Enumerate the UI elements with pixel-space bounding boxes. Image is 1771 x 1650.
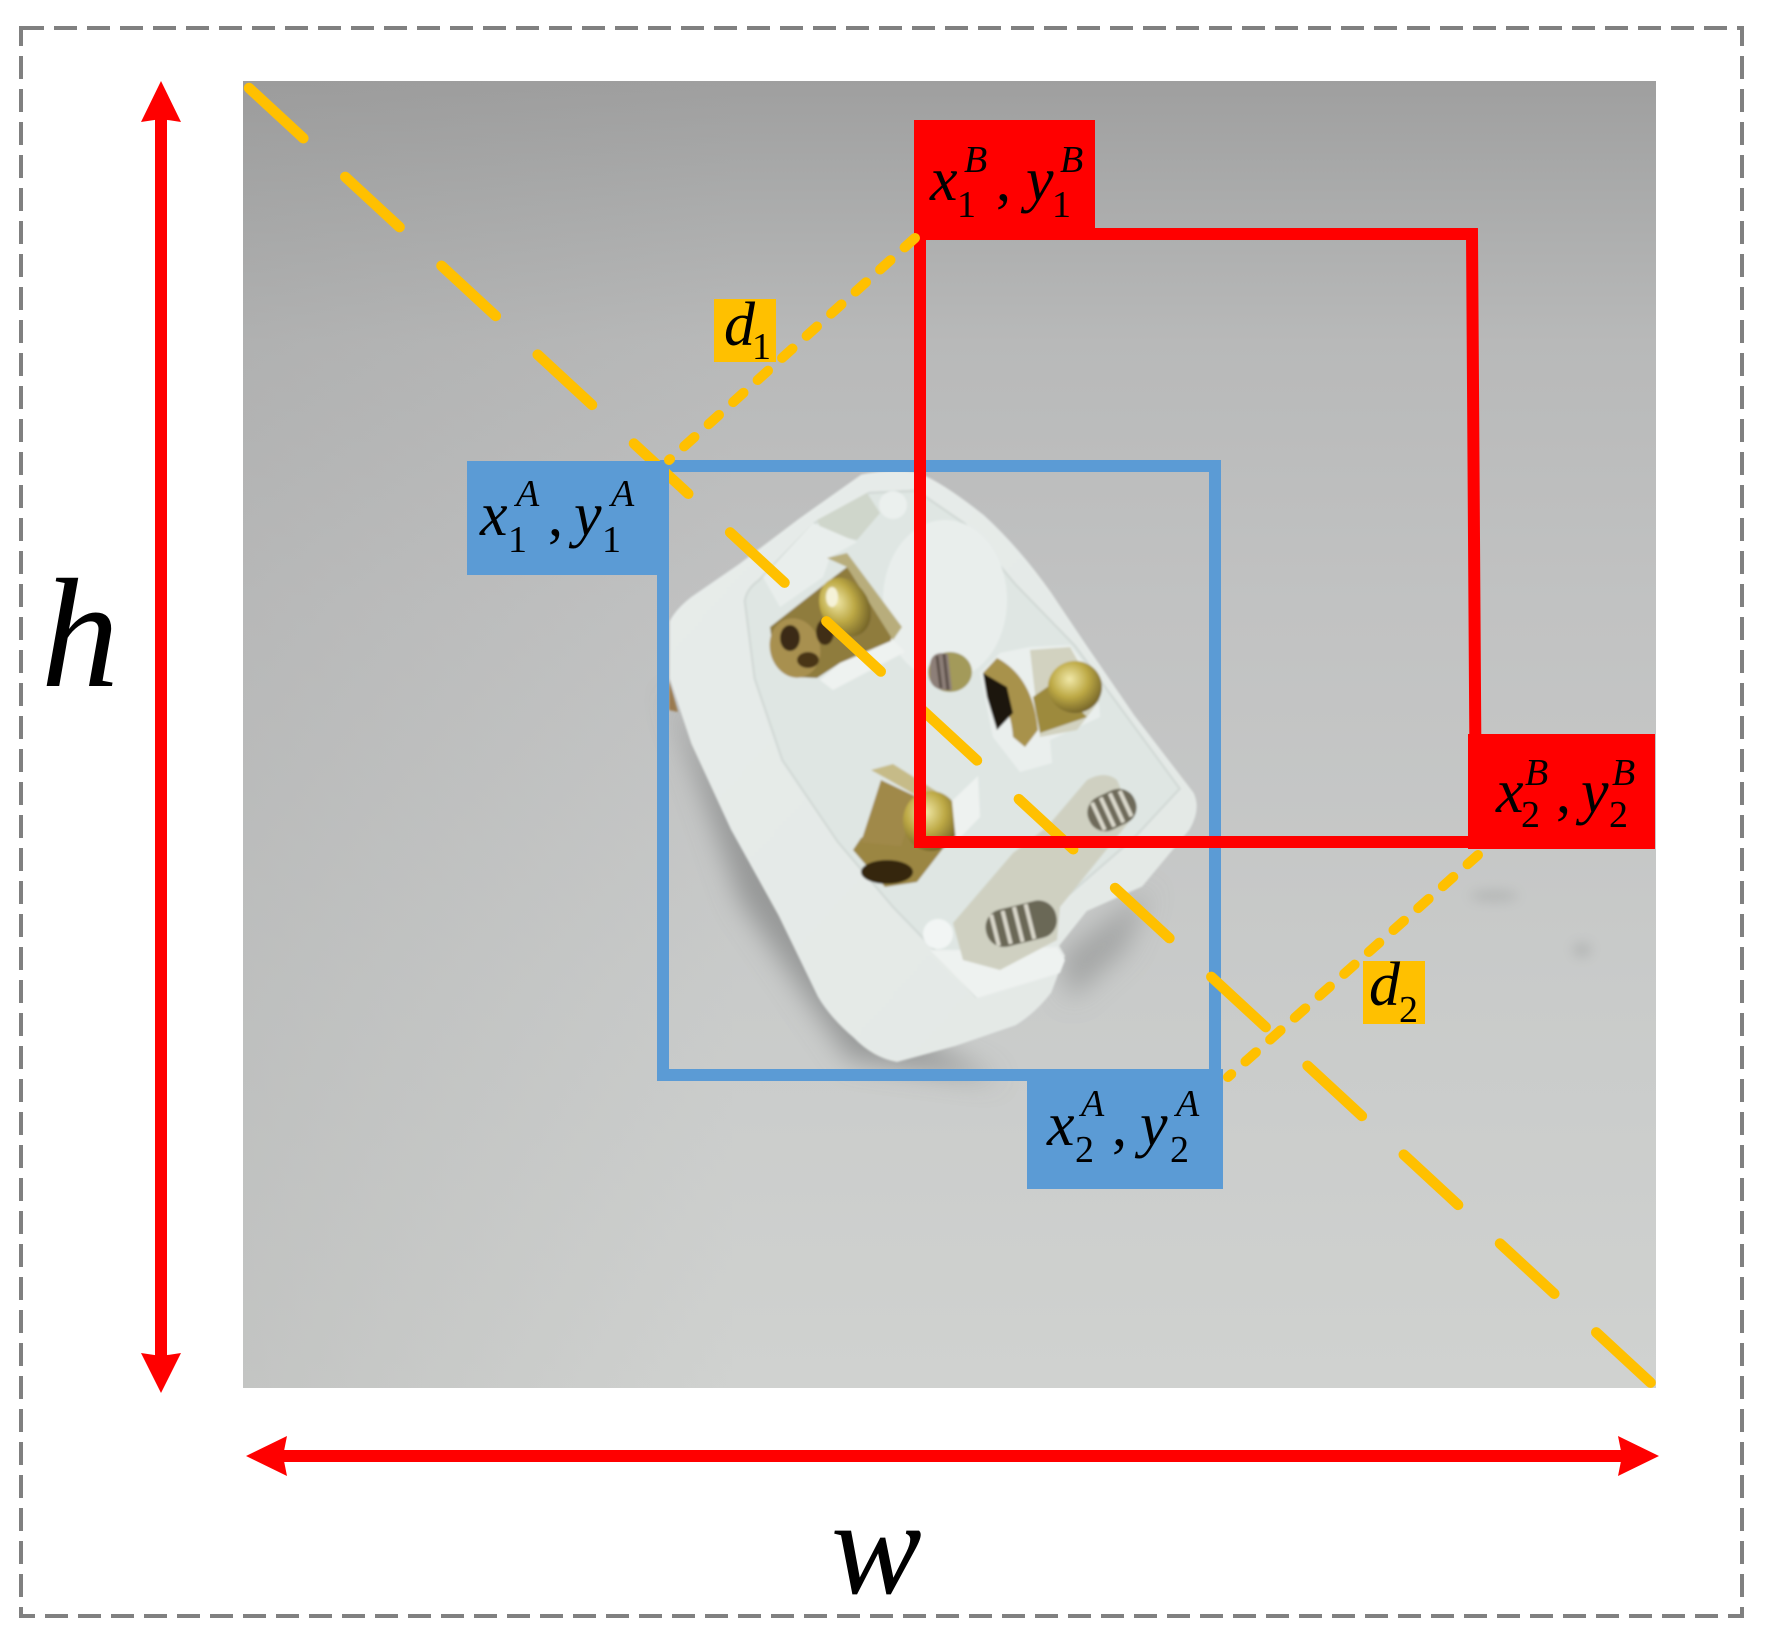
- label: box B top-left: B: [964, 139, 987, 181]
- small grey screw: [928, 652, 972, 692]
- plate retainer: [930, 947, 1065, 998]
- terminal two: [983, 658, 1102, 747]
- speck marks on surface: [1470, 891, 1591, 957]
- label: box A top-left: x: [479, 481, 508, 549]
- label: box A top-left: ,: [548, 482, 563, 548]
- terminal one clip: [763, 523, 857, 607]
- terminal one lower clip: [820, 640, 905, 690]
- plug cavity: [745, 491, 1180, 997]
- terminal two clip: [980, 645, 1100, 772]
- label: box B top-left: 1: [957, 184, 976, 226]
- label: box A top-left: [467, 461, 669, 575]
- plate screw upper: [1082, 783, 1142, 837]
- box A outline: [663, 466, 1215, 1075]
- knob top: [879, 491, 907, 519]
- distance d2 dotted line: [1228, 855, 1478, 1077]
- width label: w: [831, 1473, 922, 1623]
- label: box B bottom-right: x: [1495, 758, 1524, 826]
- plug shadows: [668, 690, 1150, 1080]
- label: box B bottom-right: 2: [1521, 794, 1540, 836]
- distance d1 dotted line: [669, 238, 915, 460]
- label: box B bottom-right: B: [1525, 752, 1548, 794]
- beige plate: [953, 775, 1133, 970]
- label: box B bottom-right: y: [1575, 758, 1609, 826]
- label: box A bottom-right: x: [1046, 1091, 1075, 1159]
- label: box A top-left: y: [568, 481, 602, 549]
- diagonal dashed line: [249, 88, 1651, 1383]
- label: box A bottom-right: 2: [1170, 1129, 1189, 1171]
- label: box A bottom-right: ,: [1112, 1092, 1127, 1158]
- lighter central recess: [883, 520, 1007, 680]
- plastic knob: [923, 919, 953, 949]
- label: box B top-left: ,: [996, 147, 1011, 213]
- label: d1: [714, 291, 776, 368]
- width arrow: [246, 1436, 1659, 1476]
- label: d2: 2: [1399, 989, 1418, 1031]
- label: box B top-left: x: [929, 146, 958, 214]
- label: box A top-left: 1: [602, 519, 621, 561]
- terminal two beige backing: [1030, 647, 1100, 737]
- label: box B bottom-right: 2: [1609, 794, 1628, 836]
- box B outline: [920, 234, 1476, 842]
- label: box A top-left: 1: [508, 519, 527, 561]
- label: box A top-left: A: [608, 473, 635, 515]
- photo: plug on grey surface: [243, 81, 1656, 1388]
- rear pin stub: [669, 680, 678, 712]
- label: d1: d: [724, 291, 756, 359]
- label: d2: [1363, 951, 1425, 1031]
- terminal three: [853, 764, 980, 887]
- label: box B top-left: y: [1020, 146, 1054, 214]
- shaded notch: [817, 493, 880, 540]
- plug: [669, 471, 1197, 1062]
- terminal one: [763, 553, 902, 683]
- label: box A bottom-right: A: [1078, 1083, 1105, 1125]
- label: box B top-left: 1: [1052, 184, 1071, 226]
- label: box A top-left: A: [513, 473, 540, 515]
- label: box A bottom-right: 2: [1075, 1129, 1094, 1171]
- plate screw lower: [982, 897, 1061, 951]
- height arrow: [141, 81, 181, 1393]
- label: d2: d: [1369, 951, 1401, 1019]
- label: box B bottom-right: [1468, 734, 1655, 849]
- label: box A bottom-right: y: [1134, 1091, 1168, 1159]
- label: box B top-left: [914, 120, 1095, 240]
- label: box B top-left: B: [1060, 139, 1083, 181]
- plug body: [670, 471, 1197, 1062]
- label: box B bottom-right: ,: [1556, 759, 1571, 825]
- height label: h: [41, 547, 119, 720]
- label: box A bottom-right: [1027, 1069, 1223, 1189]
- label: box B bottom-right: B: [1612, 752, 1635, 794]
- label: box A bottom-right: A: [1173, 1083, 1200, 1125]
- label: d1: 1: [752, 326, 771, 368]
